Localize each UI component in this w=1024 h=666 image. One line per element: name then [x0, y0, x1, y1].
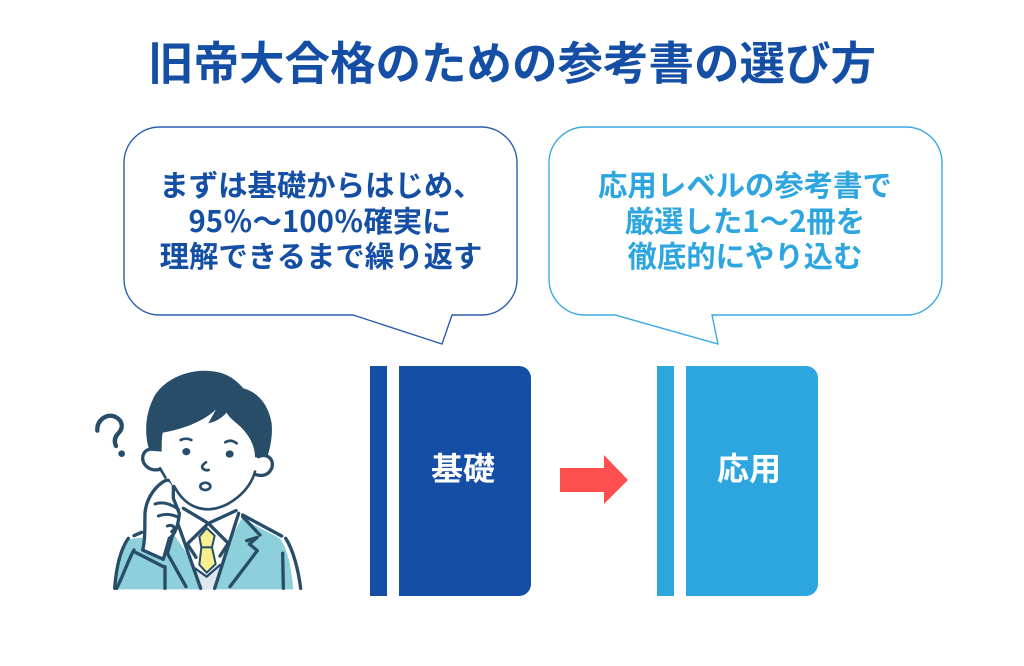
bubble outline: basics	[124, 127, 517, 344]
icon: thinking man	[97, 371, 301, 589]
book: basics	[370, 366, 531, 596]
book label: 基礎	[431, 444, 495, 490]
bubble text: advanced: 応用レベルの参考書で	[598, 163, 892, 205]
bubble text: basics: 95％～100％確実に	[188, 199, 452, 241]
arrow	[560, 455, 628, 504]
bubble text: advanced	[598, 163, 892, 276]
ears	[143, 449, 272, 475]
hand	[143, 480, 179, 559]
vest	[193, 565, 221, 589]
hair	[146, 371, 272, 457]
book cover	[686, 366, 818, 596]
book spine	[657, 366, 674, 596]
bubble text: basics: 理解できるまで繰り返す	[160, 234, 482, 276]
body	[115, 480, 301, 589]
book: advanced	[657, 366, 818, 596]
face	[161, 415, 255, 509]
book spine	[370, 366, 387, 596]
fingers	[155, 503, 178, 532]
face features	[160, 439, 255, 509]
book cover	[399, 366, 531, 596]
shirt	[178, 508, 240, 580]
book label: 応用	[717, 444, 781, 490]
panel: left speech bubble	[124, 127, 517, 344]
tie	[199, 528, 216, 573]
bubble text: basics	[159, 163, 483, 276]
bubble outline: advanced	[549, 127, 942, 344]
question mark	[97, 416, 122, 446]
bubble text: basics: まずは基礎からはじめ、	[159, 163, 483, 205]
bubble text: advanced: 徹底的にやり込む	[627, 234, 863, 276]
title: 旧帝大合格のための参考書の選び方	[148, 28, 876, 94]
bubble text: advanced: 厳選した1～2冊を	[625, 199, 865, 241]
jacket	[115, 518, 293, 589]
panel: right speech bubble	[549, 127, 942, 344]
